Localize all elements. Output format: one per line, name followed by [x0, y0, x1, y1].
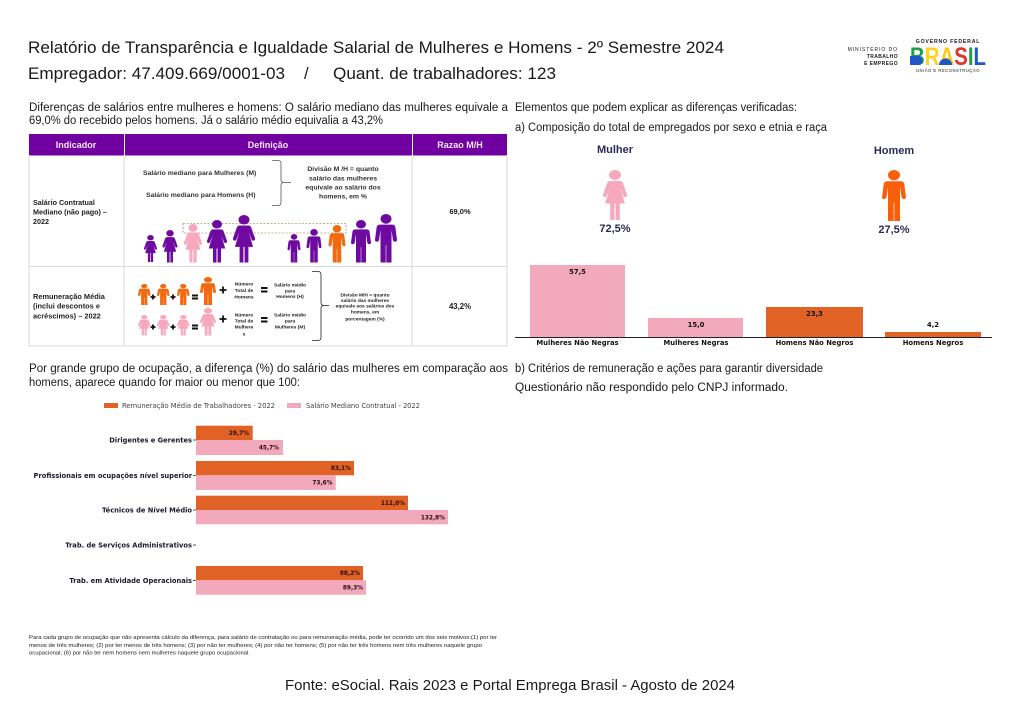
group: Profissionais: Profissionais em ocupações nível superior: [34, 472, 193, 480]
panel: Mulher: 72,5%: [599, 223, 631, 235]
row 2: Remuneração Média: equivale aos salários dos: [336, 304, 395, 310]
table: indicators: [29, 134, 507, 346]
logo: Governo Federal Brasil: UNIÃO E RECONSTRUÇÃO: [916, 68, 980, 73]
source: Fonte: eSocial. Rais 2023 e Portal Emprega Brasil - Agosto de 2024: [285, 678, 735, 694]
text: occupation groups: homens, aparece quando for maior ou menor que 100:: [29, 377, 300, 389]
operators: [150, 286, 226, 330]
row 1: Salário Contratual Mediano: Salário Contratual: [33, 198, 95, 207]
group: Dirigentes e Gerentes: Dirigentes e Gerentes: [109, 436, 192, 444]
logo: Governo Federal Brasil: BRASIL: [910, 43, 986, 71]
table header: Razao M/H: [437, 140, 483, 150]
row 2: Remuneração Média: Mulhere: [235, 324, 254, 330]
bar chart: composition by sex and race: [515, 265, 992, 347]
chart legend: [104, 402, 420, 410]
text: occupation groups: Por grande grupo de ocupação, a diferença (%) do salário das mulheres em comparação aos: [29, 363, 508, 375]
intro text: salary differences: 69,0% do recebido pelos homens. Já o salário médio equivalia a 43,2%: [29, 115, 383, 127]
group: Serviços Administrativos: Trab. de Serviços Administrativos: [65, 542, 192, 550]
intro text: salary differences: Diferenças de salários entre mulheres e homens: O salário mediano das mulheres equivale a: [29, 102, 509, 114]
title: /: [304, 65, 309, 83]
row 2: Remuneração Média: Remuneração Média: [33, 292, 106, 301]
title: Quant. de trabalhadores: 123: [333, 65, 556, 83]
row 2: Remuneração Média: Divisão M/H = quanto: [340, 292, 390, 298]
subheading b: b) Critérios de remuneração e ações para garantir diversidade: [515, 363, 823, 375]
row 1: Salário Contratual Mediano: [33, 160, 471, 262]
row 2: Remuneração Média: Número: [235, 282, 253, 288]
chart legend: Salário Mediano Contratual - 2022: [306, 402, 420, 410]
panel: Mulher: [597, 144, 634, 235]
logo: Ministério do Trabalho e Emprego: [848, 46, 898, 67]
row 2: Remuneração Média: homens, em: [351, 310, 379, 316]
row 1: Salário Contratual Mediano: equivale ao salário dos: [305, 184, 381, 192]
bar chart: composition by sex and race: 23,3: [806, 310, 823, 318]
men average formula: [138, 277, 216, 305]
row 2: Remuneração Média: Total de: [235, 318, 253, 324]
panel: Homem: 27,5%: [878, 224, 910, 236]
row 2: Remuneração Média: para: [285, 288, 295, 294]
row 2: Remuneração Média: salário das mulheres: [341, 298, 389, 304]
footnote: Para cada grupo de ocupação que não apresenta cálculo da diferença, para salário de contratação ou para remuneração média, pode ter ocorrido um dos seis motivos:(1) por ter: [29, 635, 497, 641]
footnote: ocupacional; (6) por não ter nem homens nem mulheres naquele grupo ocupacional.: [29, 650, 250, 656]
table header: Indicador: [56, 140, 97, 150]
women average formula: [138, 308, 216, 336]
row 2: Remuneração Média: porcentagem (%): [345, 316, 385, 322]
heading: elements that explain: Elementos que podem explicar as diferenças verificadas:: [515, 102, 797, 114]
row 2: Remuneração Média: acréscimos) – 2022: [33, 312, 101, 320]
icon: man: [882, 170, 906, 221]
row 1: Salário Contratual Mediano: salário das mulheres: [309, 176, 377, 182]
group: Técnicos: Técnicos de Nível Médio: [102, 506, 192, 514]
row 2: Remuneração Média: Salário médio: [274, 312, 306, 318]
title: [28, 39, 724, 83]
bar chart: composition by sex and race: Homens Negros: [903, 339, 963, 347]
group: Técnicos: 132,8%: [421, 516, 445, 522]
icon: woman: [603, 170, 627, 220]
group: Profissionais: 83,1%: [331, 466, 351, 472]
bar chart: composition by sex and race: 15,0: [688, 321, 705, 329]
footnote: [29, 635, 497, 656]
group: Atividade Operacionais: Trab. em Atividade Operacionais: [69, 577, 192, 585]
row 1: Salário Contratual Mediano: 69,0%: [449, 207, 471, 216]
row 2: Remuneração Média: [33, 272, 471, 340]
row 1: Salário Contratual Mediano: Mediano (não pago) –: [33, 208, 107, 216]
row 1: Salário Contratual Mediano: homens, em %: [319, 194, 367, 200]
bar chart: wage difference by occupation: [34, 426, 448, 595]
row 2: Remuneração Média: Mulheres (M): [275, 324, 305, 330]
footnote: menos de três mulheres; (2) por ter menos de três homens; (3) por não ter mulheres; (4) por não ter homens; (5) por não ter três homens nem três mulheres naquele grupo: [29, 643, 482, 649]
group: Atividade Operacionais: 88,2%: [340, 571, 360, 577]
bar chart: composition by sex and race: Mulheres Não Negras: [536, 339, 619, 347]
group: Profissionais: [34, 461, 354, 490]
group: Profissionais: 73,6%: [312, 480, 333, 486]
row 2: Remuneração Média: Salário médio: [274, 282, 306, 288]
row 2: Remuneração Média: s: [243, 332, 246, 338]
title: Relatório de Transparência e Igualdade Salarial de Mulheres e Homens - 2º Semestre 2024: [28, 39, 724, 57]
group: Dirigentes e Gerentes: 29,7%: [229, 431, 249, 437]
intro text: salary differences: [29, 102, 509, 127]
text: questionnaire: Questionário não respondido pelo CNPJ informado.: [515, 382, 788, 394]
bar chart: composition by sex and race: Mulheres Negras: [664, 339, 728, 347]
panel: Homem: [874, 145, 914, 236]
logo: Governo Federal Brasil: GOVERNO FEDERAL: [916, 39, 980, 45]
row 1: Salário Contratual Mediano: Salário mediano para Mulheres (M): [143, 170, 256, 177]
men figures: [288, 214, 397, 262]
group: Atividade Operacionais: 89,3%: [343, 586, 363, 592]
row 2: Remuneração Média: Número: [235, 312, 253, 318]
bar chart: composition by sex and race: Homens Não Negros: [776, 339, 853, 347]
table header: [29, 134, 507, 156]
text: occupation groups: [29, 363, 508, 389]
panel: Mulher: Mulher: [597, 144, 634, 156]
bar chart: composition by sex and race: 4,2: [927, 321, 939, 329]
title: Empregador: 47.409.669/0001-03: [28, 65, 285, 83]
logo: Ministério do Trabalho e Emprego: TRABALHO: [867, 54, 898, 60]
logo: Ministério do Trabalho e Emprego: E EMPREGO: [864, 61, 898, 67]
row 2: Remuneração Média: para: [285, 318, 295, 324]
panel: Homem: Homem: [874, 145, 914, 157]
chart legend: Remuneração Média de Trabalhadores - 2022: [122, 402, 275, 410]
group: Atividade Operacionais: [69, 566, 366, 595]
row 2: Remuneração Média: 43,2%: [449, 302, 471, 311]
subheading a: a) Composição do total de empregados por sexo e etnia e raça: [515, 122, 828, 134]
row 1: Salário Contratual Mediano: Salário mediano para Homens (H): [146, 192, 256, 199]
row 1: Salário Contratual Mediano: Divisão M /H = quanto: [307, 166, 379, 173]
group: Técnicos: 112,0%: [381, 501, 405, 507]
bar chart: composition by sex and race: 57,5: [569, 268, 586, 276]
group: Técnicos: [102, 496, 448, 524]
table header: Definição: [248, 140, 289, 150]
women figures: [144, 215, 255, 262]
row 2: Remuneração Média: Homens (H): [276, 294, 304, 300]
row 2: Remuneração Média: (inclui descontos e: [33, 302, 100, 310]
row 1: Salário Contratual Mediano: 2022: [33, 217, 49, 226]
group: Dirigentes e Gerentes: [109, 426, 283, 455]
row 2: Remuneração Média: Total de: [235, 288, 253, 294]
row 2: Remuneração Média: Homens: [234, 294, 254, 300]
group: Dirigentes e Gerentes: 45,7%: [259, 446, 279, 452]
logo: Ministério do Trabalho e Emprego: MINISTÉRIO DO: [848, 46, 898, 53]
